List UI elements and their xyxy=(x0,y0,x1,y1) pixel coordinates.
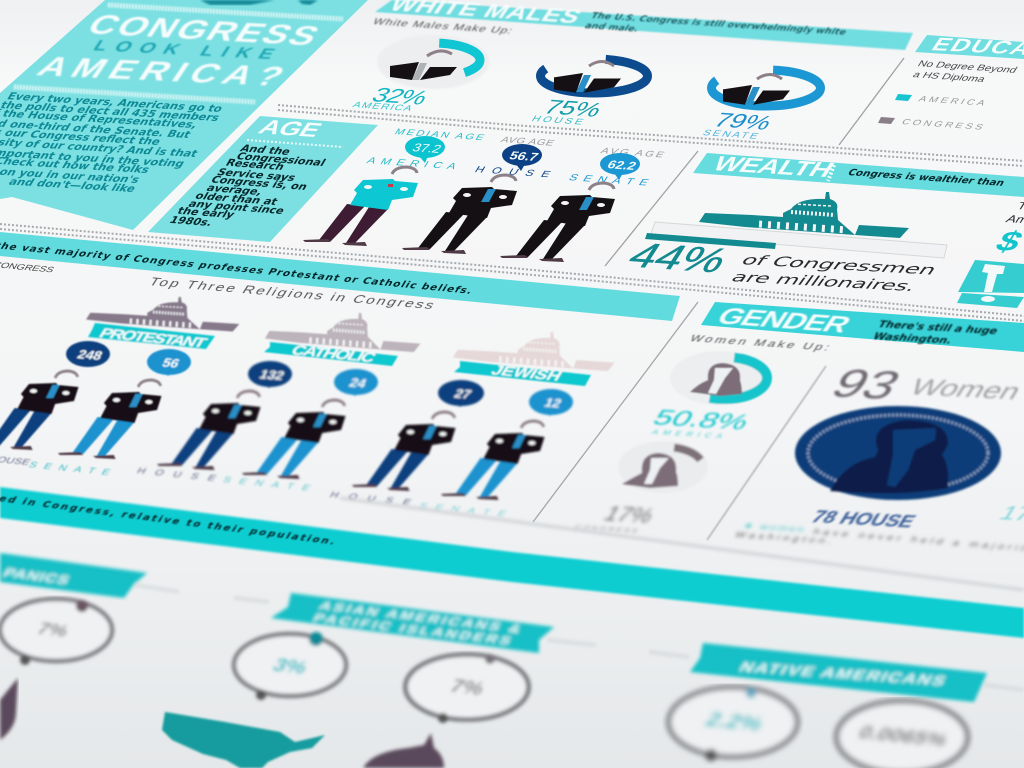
age chart: america: AMERICA xyxy=(365,156,459,172)
donut: senate 79% xyxy=(712,70,820,106)
capitol silhouette: left xyxy=(0,678,18,740)
stat ring: native congress: 0.0065% xyxy=(854,723,952,751)
age chart: america: 37.2 xyxy=(410,141,444,155)
ribbon: asian americans: PACIFIC ISLANDERS xyxy=(311,611,514,647)
figures: protestant xyxy=(0,341,191,477)
band text: ed in Congress, relative to their population. xyxy=(0,494,337,547)
ribbon: native americans: NATIVE AMERICANS xyxy=(736,659,949,688)
figures: catholic: 132 xyxy=(257,368,287,383)
dashes beside ribbons xyxy=(135,585,1024,690)
intro paragraph: Every two years, Americans go to xyxy=(5,91,225,115)
stat: 50.8%: AMERICA xyxy=(650,428,725,440)
panel: white males xyxy=(351,0,913,141)
gender note: Washington. xyxy=(733,531,834,546)
dotted divider: upper xyxy=(278,105,1024,166)
title: look like: LOOK LIKE xyxy=(90,37,279,62)
age paragraph: And the xyxy=(238,143,293,158)
age paragraph: older than at xyxy=(193,190,280,208)
band: representation xyxy=(0,487,1024,638)
age chart: america xyxy=(303,128,486,246)
heading: gender: GENDER xyxy=(711,304,856,338)
ribbon: hispanic: PANICS xyxy=(0,567,72,587)
age chart: house: HOUSE xyxy=(473,165,552,180)
figures: jewish: SENATE xyxy=(417,502,508,519)
ribbon: native americans xyxy=(690,643,987,702)
panel: wealth xyxy=(605,151,1024,308)
average wealth fragment xyxy=(989,200,1024,257)
title: congress: CONGRESS xyxy=(81,10,325,52)
intro paragraph: and don't—look like xyxy=(6,176,138,195)
icon: money xyxy=(957,260,1024,308)
age chart: senate: AVG AGE xyxy=(599,147,666,160)
band text: The U.S. Congress is still overwhelmingly white xyxy=(588,11,849,37)
capitols xyxy=(86,297,615,371)
stat: 44%: 44% xyxy=(620,236,736,280)
caption: Women Make Up: xyxy=(688,332,832,353)
label: 75% house: 75% xyxy=(539,96,607,121)
map: united states xyxy=(162,712,325,768)
stat: 17% xyxy=(573,501,660,534)
ribbon: catholic: CATHOLIC xyxy=(288,342,379,365)
age paragraph: Service says xyxy=(215,166,298,184)
age paragraph xyxy=(167,143,328,229)
donut: women america xyxy=(670,351,770,405)
ribbon: asian americans xyxy=(271,593,554,653)
stat ring: hispanic xyxy=(0,599,112,665)
figures: jewish: 27 xyxy=(452,387,474,401)
band text: Congress is wealthier than xyxy=(845,167,1007,188)
panel: religion xyxy=(0,232,680,519)
label: 75% house: HOUSE xyxy=(530,115,585,127)
heading: top three: Top Three Religions in Congress xyxy=(147,275,437,311)
age chart: senate: 62.2 xyxy=(605,158,639,172)
icon: capitol xyxy=(699,192,909,238)
donut: women congress xyxy=(618,441,708,493)
age chart: house: 56.7 xyxy=(507,149,541,163)
caption: White Males Make Up: xyxy=(371,17,514,36)
dotted divider: middle xyxy=(0,224,1024,321)
stat: 50.8%: 50.8% xyxy=(648,405,755,434)
blurred rule xyxy=(340,498,1024,590)
band text: the vast majority of Congress professes Protestant or Catholic beliefs. xyxy=(0,241,474,296)
ribbon: asian americans: ASIAN AMERICANS & xyxy=(317,599,524,635)
stat ring: native congress xyxy=(836,701,968,768)
figures: jewish: HOUSE xyxy=(328,491,413,507)
panel: education xyxy=(839,34,1024,145)
label: 79% senate: 79% xyxy=(709,109,777,134)
stat: 78 house: 78 HOUSE xyxy=(808,506,920,531)
figures: jewish xyxy=(328,380,573,519)
gender note: ★ women xyxy=(741,522,806,535)
figures: catholic xyxy=(135,361,378,493)
stat: 17%: CONGRESS xyxy=(573,524,639,534)
stat: 17%: 17% xyxy=(599,501,660,527)
panel: age xyxy=(148,116,378,242)
panel: gender xyxy=(533,302,1024,554)
age paragraph: any point since xyxy=(186,198,287,217)
band text xyxy=(870,318,1001,346)
age paragraph: Research xyxy=(223,157,287,173)
intro paragraph: on you in our nation's xyxy=(0,166,142,186)
stat: 93 women xyxy=(823,361,1024,408)
figures: jewish: 12 xyxy=(542,396,564,410)
bar: 44 percent xyxy=(645,222,947,258)
age paragraph: Congressional xyxy=(234,150,328,169)
ribbon: jewish xyxy=(454,361,591,386)
stat ring: native america xyxy=(669,687,797,761)
legend xyxy=(878,94,987,132)
age chart: house xyxy=(402,136,556,254)
stat ring: native america: 2.2% xyxy=(701,708,768,735)
ribbon: jewish: JEWISH xyxy=(488,362,565,384)
top fragment: ornament xyxy=(200,0,318,5)
heading: wealth: WEALTH xyxy=(708,152,839,182)
figures: protestant: 56 xyxy=(160,356,182,370)
age chart: house: AVG AGE xyxy=(499,136,556,148)
band text: There's still a huge xyxy=(875,318,1001,337)
title: america: AMERICA? xyxy=(31,52,290,92)
band text: and male. xyxy=(582,21,641,34)
age chart: senate xyxy=(500,147,666,262)
figures: catholic: SENATE xyxy=(221,476,312,493)
stat: 93 women: Women xyxy=(905,375,1024,405)
stat text xyxy=(727,253,940,294)
ribbon: protestant: PROTESTANT xyxy=(96,325,211,351)
intro paragraph xyxy=(0,91,225,195)
label: 32% america xyxy=(351,84,433,113)
age chart: senate: SENATE xyxy=(567,173,650,188)
label: 32% america: AMERICA xyxy=(351,101,414,113)
band text: Washington. xyxy=(870,330,955,346)
figures: protestant: 248 xyxy=(75,348,105,363)
stat ring: asian america xyxy=(234,632,346,700)
stat ring: hispanic: 7% xyxy=(33,620,72,641)
title text xyxy=(14,5,343,102)
age chart: america: MEDIAN AGE xyxy=(393,128,486,142)
intro paragraph: the polls to elect all 435 members xyxy=(0,99,222,124)
panel: title ribbon xyxy=(0,0,368,230)
age paragraph: the early xyxy=(175,205,237,221)
figures: catholic: 24 xyxy=(347,376,369,390)
age paragraph: Congress is, on xyxy=(209,174,310,193)
icon: women in house medallion xyxy=(795,406,1001,500)
caption: a HS Diploma xyxy=(911,70,987,84)
ribbon: hispanic xyxy=(0,553,147,598)
stat text: are millionaires. xyxy=(727,270,920,294)
age paragraph: average, xyxy=(204,182,265,198)
ribbon: catholic xyxy=(264,342,398,366)
figures: catholic: HOUSE xyxy=(135,467,218,483)
age paragraph: 1980s. xyxy=(167,214,215,229)
caption xyxy=(911,59,1019,84)
donut: house 75% xyxy=(540,59,648,93)
legend: CONGRESS xyxy=(900,118,985,132)
stat ring: asian america: 3% xyxy=(269,655,311,678)
figures: protestant: SENATE xyxy=(27,461,112,477)
capitol silhouette: bottom xyxy=(363,733,444,768)
stat ring: asian congress xyxy=(405,654,529,723)
donut: america 32% xyxy=(377,35,489,89)
label: 32% america: 32% xyxy=(367,84,433,109)
gender note xyxy=(733,522,1024,554)
stat ring: asian congress: 7% xyxy=(446,676,488,699)
heading: age: AGE xyxy=(254,116,326,142)
stat text: of Congressmen xyxy=(737,253,940,278)
label: 79% senate: SENATE xyxy=(701,129,760,141)
legend: AMERICA xyxy=(917,95,987,108)
caption: No Degree Beyond xyxy=(916,59,1019,75)
stat: 93 women: 93 xyxy=(823,361,910,408)
